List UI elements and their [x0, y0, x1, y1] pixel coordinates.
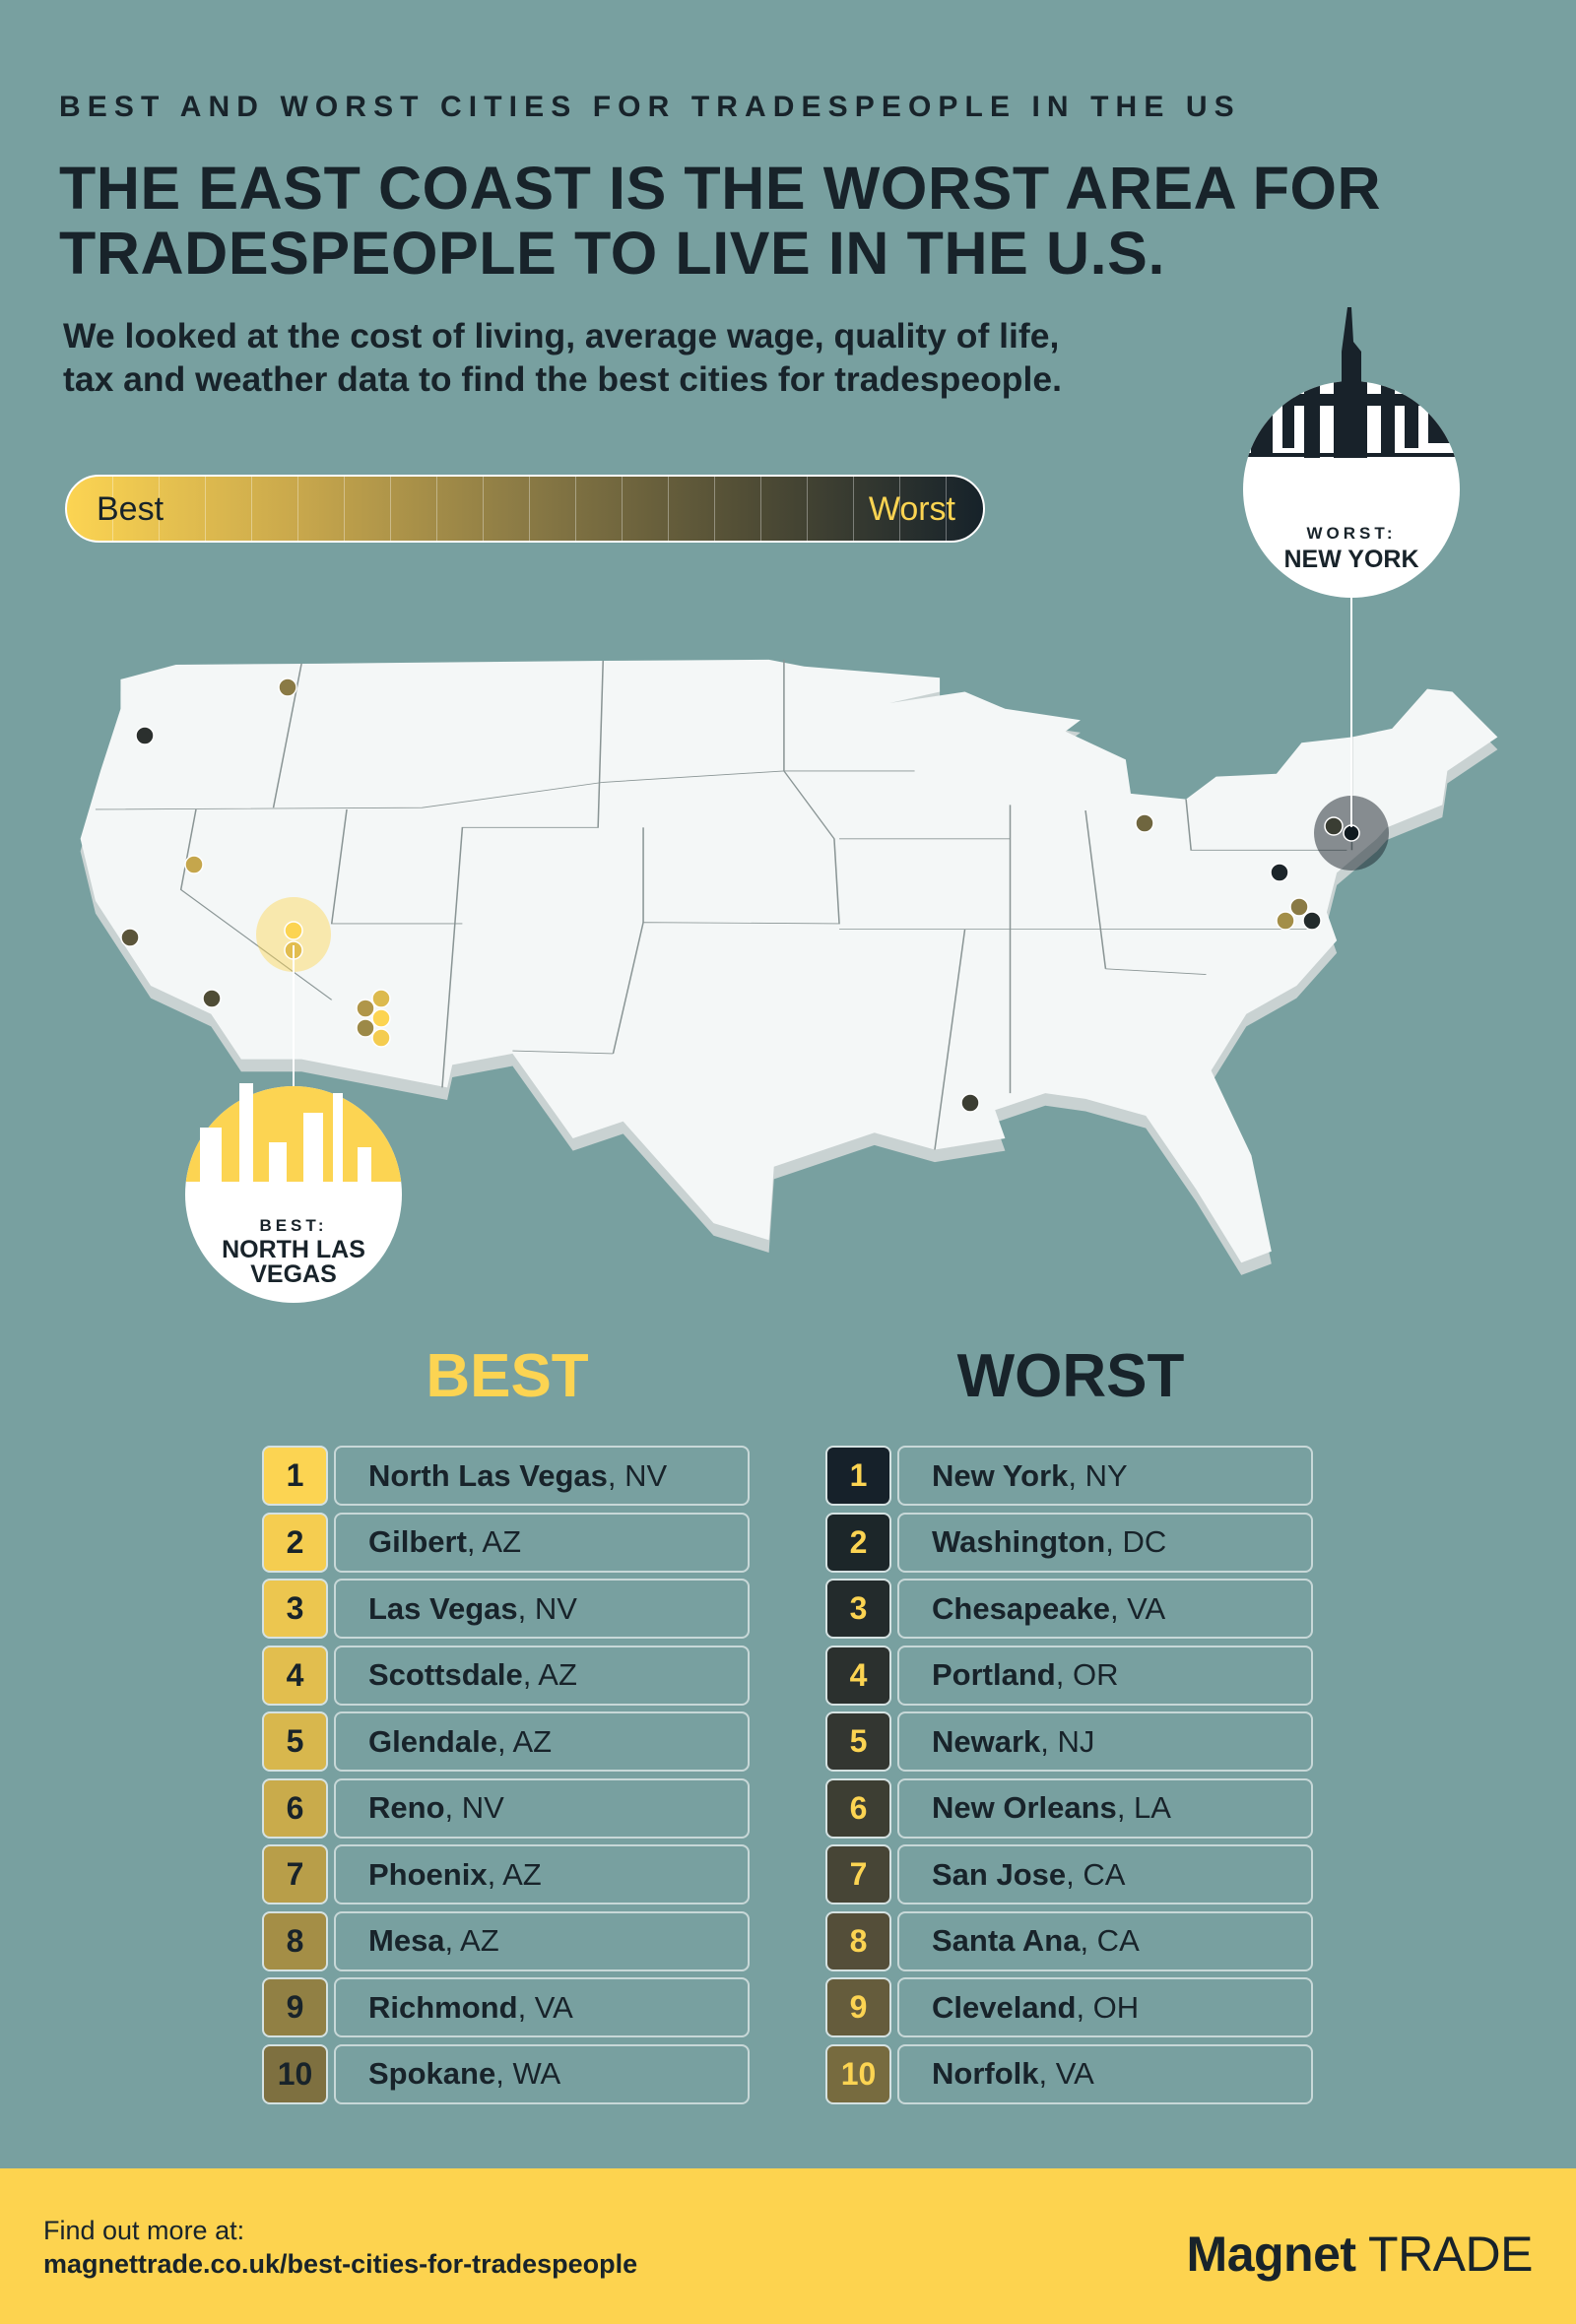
map city dots: [120, 678, 1389, 1113]
list: best: Spokane: [368, 2056, 495, 2091]
list: worst: , VA: [1038, 2056, 1094, 2091]
list: best: Reno: [368, 1790, 445, 1825]
footer link text: Find out more at:: [43, 2216, 244, 2245]
list: best: , AZ: [497, 1723, 552, 1759]
list: worst: , OH: [1076, 1989, 1139, 2025]
list: worst: 9: [850, 1989, 867, 2025]
list: best: 5: [287, 1723, 303, 1759]
list: worst: Norfolk: [932, 2056, 1038, 2091]
intro text: [63, 316, 1062, 399]
list: best: 4: [287, 1656, 303, 1692]
callout: best North Las Vegas: [185, 945, 402, 1303]
list: best: , AZ: [467, 1524, 521, 1559]
list: worst: , LA: [1117, 1790, 1171, 1825]
callout: worst New York: WORST:: [1306, 524, 1397, 543]
list: worst: , OR: [1056, 1657, 1118, 1692]
list: worst: 6: [850, 1790, 867, 1826]
list: best: [262, 1446, 750, 2104]
footer link text: magnettrade.co.uk/best-cities-for-tradespeople: [43, 2249, 637, 2279]
list: worst: Santa Ana: [932, 1923, 1080, 1958]
list: best: , NV: [445, 1790, 504, 1825]
legend bar: Best: [97, 490, 164, 528]
list: best: 1: [287, 1457, 303, 1493]
list: worst: New Orleans: [932, 1790, 1117, 1825]
legend bar: Worst: [869, 490, 955, 528]
list: best: 9: [287, 1989, 303, 2025]
list: worst: [825, 1446, 1313, 2104]
footer: [0, 2168, 1576, 2324]
list: best: Mesa: [368, 1923, 445, 1958]
heading: WORST: WORST: [957, 1342, 1184, 1410]
callout: best North Las Vegas: VEGAS: [250, 1260, 337, 1288]
callout: worst New York: [1243, 307, 1460, 827]
legend bar: [65, 475, 985, 543]
list: worst: 5: [850, 1723, 867, 1759]
list: worst: 8: [850, 1922, 867, 1958]
list: best: , WA: [495, 2056, 560, 2091]
list: worst: , NJ: [1040, 1723, 1094, 1759]
title: [59, 155, 1381, 287]
list: worst: 7: [850, 1856, 867, 1892]
list: best: Gilbert: [368, 1524, 467, 1559]
list: worst: , CA: [1080, 1923, 1140, 1958]
list: best: , AZ: [488, 1857, 542, 1891]
list: best: , AZ: [523, 1657, 577, 1692]
list: best: Las Vegas: [368, 1591, 518, 1625]
list: best: Scottsdale: [368, 1657, 523, 1692]
list: best: , VA: [518, 1989, 573, 2025]
heading: BEST: BEST: [426, 1342, 589, 1410]
list: best: 10: [278, 2056, 312, 2092]
list: worst: New York: [932, 1457, 1068, 1493]
list: worst: 2: [850, 1524, 867, 1560]
list: worst: Portland: [932, 1657, 1056, 1692]
kicker: BEST AND WORST CITIES FOR TRADESPEOPLE IN THE US: [59, 91, 1241, 123]
list: worst: Newark: [932, 1723, 1040, 1759]
list: best: 3: [287, 1590, 303, 1626]
list: best: North Las Vegas: [368, 1457, 608, 1493]
list: worst: Chesapeake: [932, 1591, 1110, 1625]
list: best: Glendale: [368, 1723, 497, 1759]
list: worst: Cleveland: [932, 1989, 1076, 2025]
title: THE EAST COAST IS THE WORST AREA FOR: [59, 155, 1381, 222]
list: worst: Washington: [932, 1524, 1105, 1559]
list: worst: , NY: [1068, 1457, 1128, 1493]
intro text: We looked at the cost of living, average wage, quality of life,: [63, 316, 1059, 355]
map of US: [81, 660, 1497, 1275]
list: worst: , DC: [1105, 1524, 1166, 1559]
footer link text: [43, 2216, 637, 2279]
list: worst: San Jose: [932, 1857, 1066, 1891]
logo: Magnet TRADE: [1187, 2227, 1533, 2282]
list: worst: 1: [850, 1457, 867, 1493]
list: best: , AZ: [445, 1923, 499, 1958]
list: best: 7: [287, 1856, 303, 1892]
list: best: , NV: [518, 1591, 577, 1625]
list: best: Phoenix: [368, 1857, 488, 1891]
list: best: 2: [287, 1524, 303, 1560]
list: worst: , CA: [1066, 1857, 1125, 1891]
callout: best North Las Vegas: NORTH LAS: [222, 1236, 365, 1263]
list: worst: , VA: [1110, 1591, 1165, 1625]
list: worst: 10: [841, 2056, 876, 2092]
list: worst: 3: [850, 1590, 867, 1626]
list: worst: 4: [850, 1656, 867, 1692]
list: best: Richmond: [368, 1989, 518, 2025]
intro text: tax and weather data to find the best cities for tradespeople.: [63, 359, 1062, 399]
callout: worst New York: NEW YORK: [1283, 546, 1419, 573]
list: best: 6: [287, 1790, 303, 1826]
title: TRADESPEOPLE TO LIVE IN THE U.S.: [59, 220, 1165, 287]
list: best: , NV: [608, 1457, 667, 1493]
list: best: 8: [287, 1922, 303, 1958]
callout: best North Las Vegas: BEST:: [259, 1216, 328, 1235]
